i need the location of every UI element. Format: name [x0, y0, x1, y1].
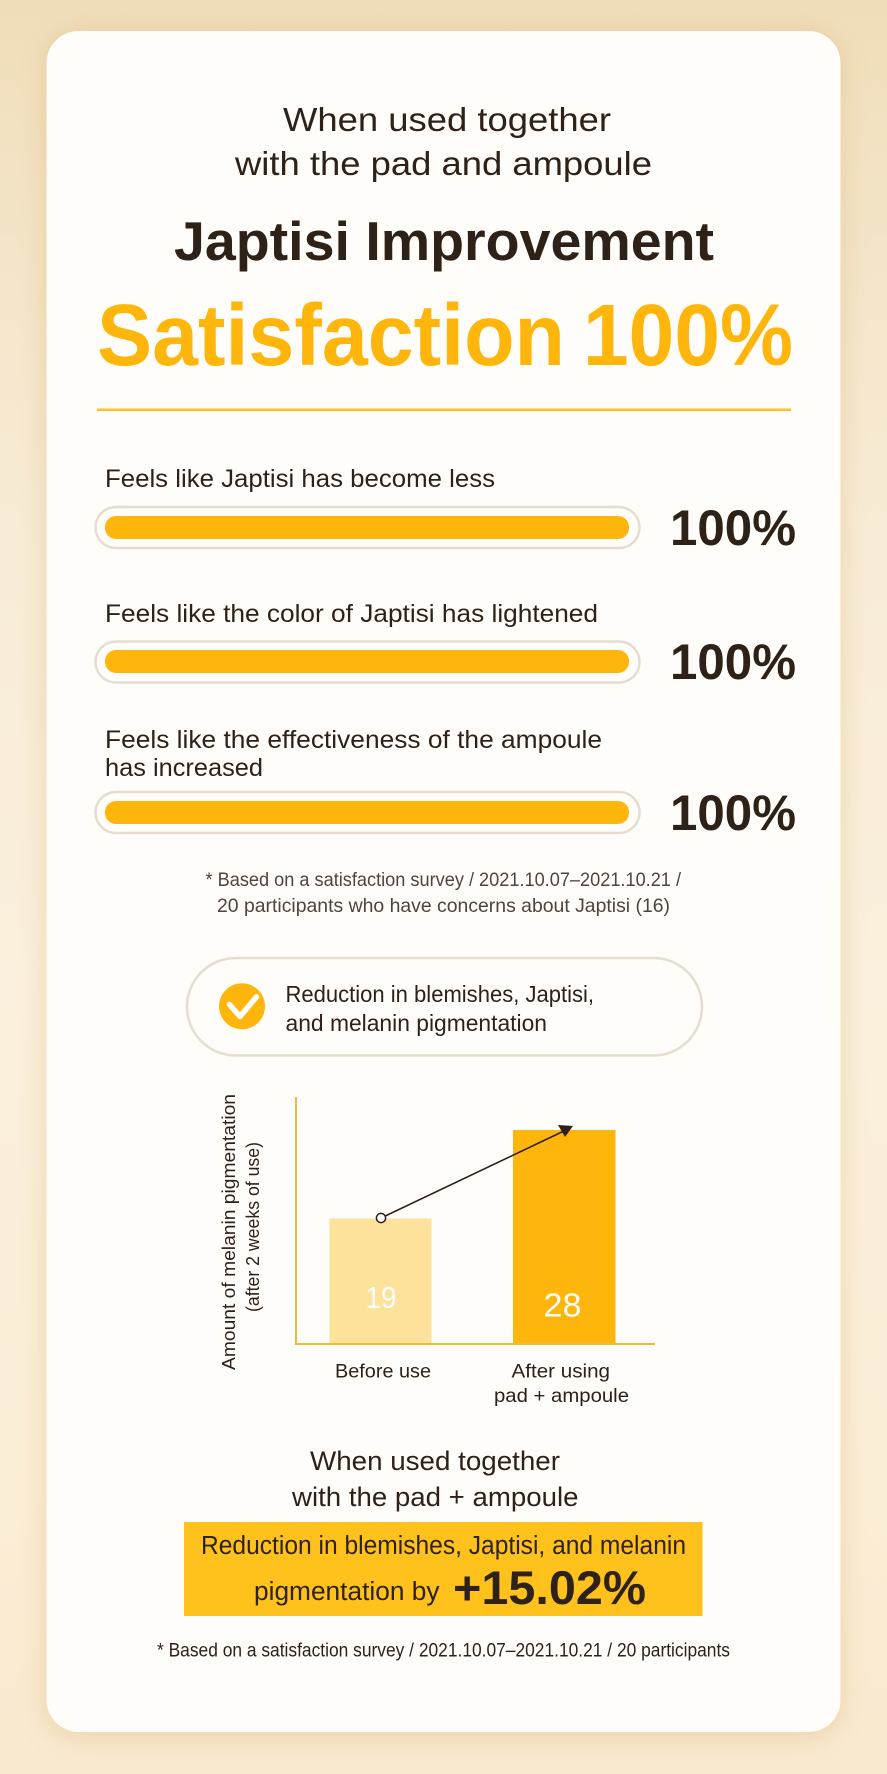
- value: result 2: 100%: [670, 634, 796, 690]
- text: pill label: [286, 981, 594, 1036]
- heading: intro lines: When used together: [283, 101, 611, 138]
- text: pill label: Reduction in blemishes, Japtisi,: [286, 981, 594, 1007]
- footnote: survey details 2: * Based on a satisfaction survey / 2021.10.07–2021.10.21 / 20 participants: [157, 1640, 730, 1662]
- bar: before use: [330, 1218, 432, 1344]
- value: 28: 28: [544, 1286, 582, 1324]
- bar track: result 2: [96, 642, 640, 682]
- x label: after use: [494, 1360, 629, 1407]
- title: Satisfaction 100%: Satisfaction: [97, 287, 565, 384]
- bar fill: result 1: [105, 516, 629, 539]
- value: 19: 19: [366, 1280, 396, 1315]
- heading: intro lines: with the pad and ampoule: [234, 145, 652, 182]
- label: result 1: Feels like Japtisi has become less: [105, 465, 495, 493]
- arrow: increase: [376, 1125, 573, 1223]
- bar fill: result 2: [105, 650, 629, 673]
- title: Satisfaction 100%: 100%: [583, 287, 793, 384]
- label: result 2: Feels like the color of Japtisi has lightened: [105, 600, 598, 628]
- label: result 3: Feels like the effectiveness of the ampoule: [105, 726, 602, 754]
- axes: [296, 1097, 655, 1344]
- value: result 1: 100%: [670, 500, 796, 556]
- y axis label: (after 2 weeks of use): [242, 1142, 263, 1312]
- heading: intro lines: [234, 101, 652, 182]
- panel: survey result 3: [96, 726, 796, 841]
- callout: result highlight: Reduction in blemishes, Japtisi, and melanin: [201, 1532, 686, 1560]
- callout: result highlight: [184, 1522, 702, 1616]
- bar track: result 3: [96, 792, 640, 833]
- panel: survey result 1: [96, 465, 796, 556]
- x label: after use: pad + ampoule: [494, 1385, 629, 1407]
- x label: before use: Before use: [335, 1360, 431, 1382]
- bar fill: result 3: [105, 801, 629, 824]
- callout: result highlight: pigmentation by: [254, 1578, 440, 1606]
- bar track: result 1: [96, 507, 640, 548]
- footnote: survey details: 20 participants who have concerns about Japtisi (16): [217, 895, 670, 917]
- bar chart: melanin pigmentation: [218, 1094, 655, 1407]
- y axis label: Amount of melanin pigmentation: [218, 1094, 239, 1370]
- heading: pad + ampoule: When used together: [310, 1446, 560, 1476]
- heading: pad + ampoule: [291, 1446, 578, 1512]
- label: result 3: has increased: [105, 754, 263, 782]
- value: +15.02%: +15.02%: [453, 1561, 646, 1614]
- text: pill label: and melanin pigmentation: [286, 1010, 547, 1036]
- y axis label: [218, 1094, 263, 1370]
- x label: after use: After using: [512, 1360, 610, 1382]
- footnote: survey details: [206, 869, 682, 917]
- bar: after use: [513, 1130, 616, 1344]
- heading: pad + ampoule: with the pad + ampoule: [291, 1482, 578, 1512]
- icon: check mark: [219, 983, 265, 1029]
- panel: survey result 2: [96, 600, 796, 690]
- label: result 3: [105, 726, 602, 782]
- value: result 3: 100%: [670, 785, 796, 841]
- title: Japtisi Improvement: Japtisi Improvement: [174, 210, 714, 272]
- footnote: survey details: * Based on a satisfaction survey / 2021.10.07–2021.10.21 /: [206, 869, 682, 891]
- callout: reduction pill: [187, 958, 702, 1056]
